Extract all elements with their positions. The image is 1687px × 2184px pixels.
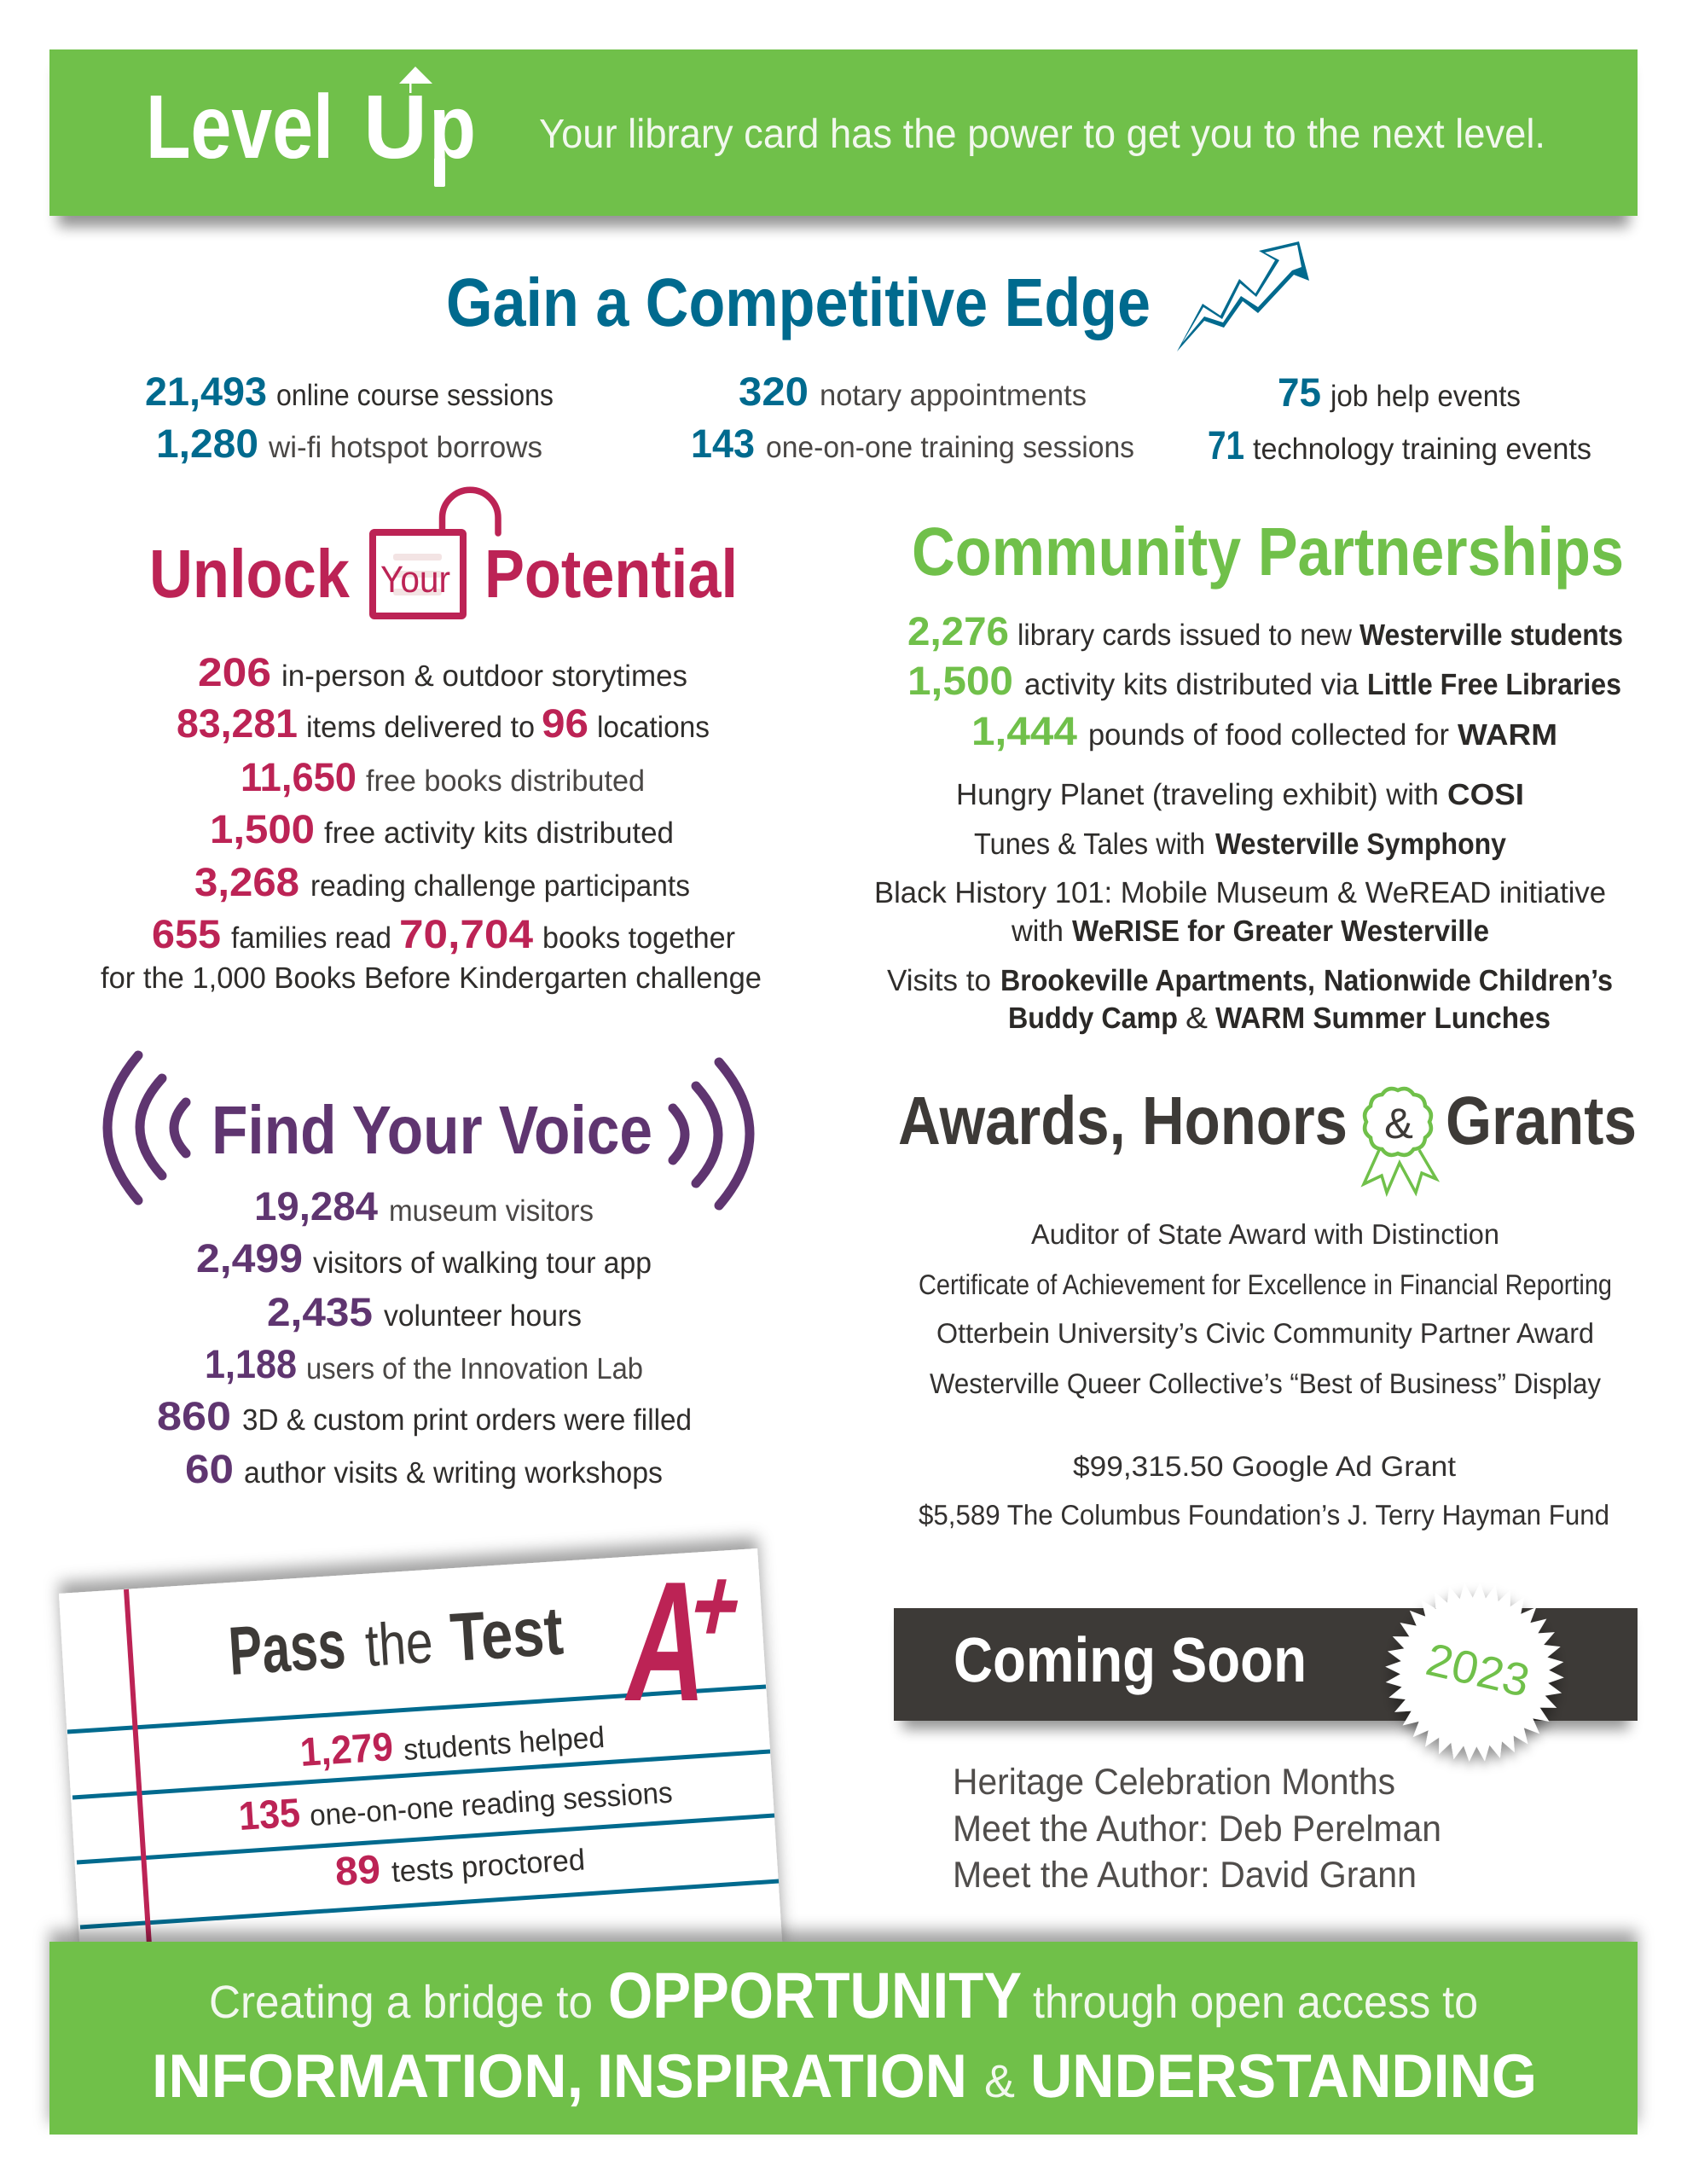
stats: 75 [1278,369,1321,415]
mission line 1: Creating a bridge to [209,1977,593,2028]
banner [894,1608,1638,1729]
stats: technology training events [1253,433,1591,466]
stats: students helped [403,1721,606,1767]
icon: open padlock [373,490,498,616]
stats [907,608,1623,753]
margin line [126,1589,149,1945]
stats: books together [542,921,735,955]
programs list: Westerville Symphony [1215,828,1506,861]
upcoming list [953,1762,1441,1896]
stats: online course sessions [276,379,554,412]
stats: items delivered to [306,711,535,744]
stats: in-person & outdoor storytimes [281,659,687,693]
heading: Coming Soon [954,1624,1307,1695]
stats: wi-fi hotspot borrows [268,431,542,464]
heading: Test [448,1593,565,1676]
stats: 655 [152,911,221,956]
awards list: Westerville Queer Collective’s “Best of Business” Display [930,1368,1601,1399]
title: Level Up: Level [146,77,333,177]
icon: A+ grade: A [624,1547,705,1737]
heading right: Potential [484,536,738,612]
heading left: Awards, Honors [898,1083,1348,1159]
programs list: & [1186,1002,1208,1035]
panel: Unlock Your Potential [101,490,762,995]
awards list: $5,589 The Columbus Foundation’s J. Terry Hayman Fund [919,1499,1609,1531]
stats: 1,280 [156,421,258,466]
stats: 860 [157,1393,231,1438]
stats: 1,500 [907,658,1013,703]
stats: notary appointments [820,379,1087,412]
stats: museum visitors [389,1194,594,1228]
panel: Awards, Honors & Grants [898,1083,1637,1531]
stats: 3D & custom print orders were filled [242,1403,692,1437]
upcoming list: Meet the Author: Deb Perelman [953,1809,1441,1850]
mission line 1: OPPORTUNITY [608,1960,1022,2032]
heading left: Unlock [149,536,350,612]
stats: 1,279 [299,1723,394,1774]
heading: the [363,1608,435,1679]
awards list [919,1218,1612,1531]
ruled lines [67,1687,779,1927]
programs list [874,778,1613,1035]
icon: award rosette: & [1384,1100,1413,1147]
programs list: Nationwide Children’s [1324,964,1613,997]
stats: 89 [333,1846,382,1894]
stats: 21,493 [145,369,267,414]
stats: 206 [198,649,271,694]
stats: volunteer hours [384,1299,582,1333]
heading: Pass [226,1606,348,1689]
programs list: Black History 101: Mobile Museum & WeREAD initiative [874,876,1606,909]
programs list: WARM Summer Lunches [1215,1002,1551,1035]
icon: starburst 2023 [1372,1570,1577,1774]
programs list: WeRISE for Greater Westerville [1072,915,1489,948]
stats: one-on-one training sessions [766,431,1134,464]
stats: tests proctored [391,1843,586,1889]
stats [237,1721,674,1894]
stats: 11,650 [241,754,357,799]
stats: 1,188 [205,1341,297,1386]
awards list: Otterbein University’s Civic Community Partner Award [936,1317,1594,1349]
stats: free activity kits distributed [324,816,674,850]
stats: 71 [1208,422,1244,468]
title: Level Up: p [429,77,476,177]
stats: for the 1,000 Books Before Kindergarten challenge [101,961,762,995]
stats [101,649,762,995]
title: Level Up: U [363,77,427,177]
stats: users of the Innovation Lab [306,1352,643,1385]
icon: open padlock: Your [380,559,450,601]
icon: sound waves [107,1055,750,1205]
tagline: Your library card has the power to get you to the next level. [539,112,1545,157]
stats: author visits & writing workshops [244,1456,663,1490]
stats: families read [231,921,391,955]
stats: activity kits distributed via [1024,668,1359,701]
stats [157,1183,692,1491]
programs list: Brookeville Apartments, [1000,964,1315,997]
programs list: COSI [1447,778,1524,811]
stats: 1,444 [971,708,1077,753]
stats: reading challenge participants [310,869,690,903]
mission line 2: & [984,2056,1015,2107]
mission line 2: UNDERSTANDING [1030,2042,1537,2111]
panel: Community Partnerships [874,514,1624,1035]
mission line 2 [152,2042,1537,2111]
stats: visitors of walking tour app [313,1246,652,1280]
stats: 60 [185,1446,234,1491]
stats: 2,435 [267,1289,373,1334]
icon: zigzag arrow [1177,241,1309,351]
stats: 143 [691,421,755,466]
heading [226,1593,565,1689]
stats: pounds of food collected for [1088,718,1449,752]
stats: locations [597,711,710,744]
stats: 3,268 [194,859,299,904]
mission line 2: INFORMATION, [152,2042,583,2111]
paper sheet [59,1548,783,1954]
heading: Find Your Voice [212,1092,652,1168]
upcoming list: Meet the Author: David Grann [953,1855,1417,1896]
icon: award rosette [1364,1089,1436,1193]
stats: Westerville students [1359,619,1623,652]
footer banner [49,1942,1638,2135]
mission line 1 [209,1960,1478,2032]
stats: 135 [237,1789,301,1838]
stats: one-on-one reading sessions [309,1776,674,1833]
awards list: $99,315.50 Google Ad Grant [1073,1450,1456,1482]
header banner [49,49,1638,227]
stats: job help events [1330,380,1521,413]
stats: 19,284 [254,1183,378,1228]
panel: Coming Soon [894,1570,1638,1896]
awards list: Certificate of Achievement for Excellence in Financial Reporting [919,1269,1612,1300]
heading: Gain a Competitive Edge [446,264,1151,340]
stats: 2,499 [196,1235,303,1281]
title: Level Up [146,67,476,187]
icon: A+ grade: + [680,1546,753,1665]
stats: WARM [1458,718,1557,752]
stats: 2,276 [907,608,1009,653]
panel: Gain a Competitive Edge [145,241,1591,468]
programs list: Visits to [887,964,991,997]
panel: Pass the Test notebook paper [59,1546,783,1954]
mission line 1: through open access to [1033,1977,1478,2028]
stats: free books distributed [366,764,645,798]
programs list: Tunes & Tales with [974,828,1205,861]
upcoming list: Heritage Celebration Months [953,1762,1395,1803]
stats: Little Free Libraries [1367,668,1621,701]
programs list: with [1011,915,1064,948]
stats: 96 [542,700,588,746]
stats: 1,500 [210,806,315,851]
panel: Find Your Voice [107,1055,750,1491]
stats: 320 [739,369,809,414]
programs list: Buddy Camp [1008,1002,1178,1035]
stats [145,369,1591,468]
stats: 70,704 [399,911,533,956]
stats: 83,281 [177,700,298,746]
awards list: Auditor of State Award with Distinction [1031,1218,1499,1250]
stats: library cards issued to new [1017,619,1353,652]
mission line 2: INSPIRATION [597,2042,967,2111]
programs list: Hungry Planet (traveling exhibit) with [956,778,1439,811]
icon: starburst 2023: 2023 [1422,1634,1534,1707]
heading right: Grants [1446,1083,1637,1159]
